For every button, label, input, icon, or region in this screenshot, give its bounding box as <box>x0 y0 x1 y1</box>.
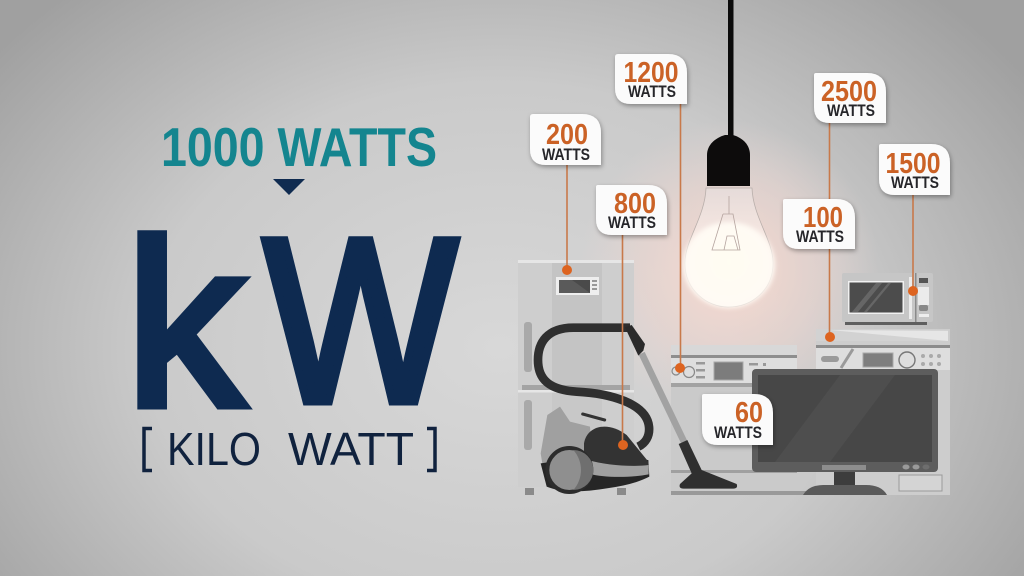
vacuum lid handle <box>583 414 605 420</box>
stove body <box>816 329 950 495</box>
opening bracket <box>144 428 152 470</box>
unit: WATTS <box>714 423 762 442</box>
unit: WATTS <box>891 173 939 192</box>
card <box>879 144 950 195</box>
stove controls <box>821 349 941 368</box>
fridge body <box>518 262 634 487</box>
label: 800 watts <box>596 185 667 450</box>
label: 100 watts <box>783 199 855 249</box>
bulb inner light <box>683 222 775 308</box>
label: 200 watts <box>530 114 601 275</box>
value: 1500 <box>886 148 940 180</box>
appliance: television <box>752 369 938 495</box>
bulb filament <box>712 196 740 250</box>
value: 800 <box>614 188 656 220</box>
vacuum hose grip <box>625 325 645 356</box>
label: 1200 watts <box>615 54 687 373</box>
bulb socket <box>707 135 750 186</box>
letter W: W <box>264 192 457 451</box>
vacuum nozzle <box>679 440 737 489</box>
card <box>814 73 886 123</box>
washer floor line <box>671 491 950 495</box>
fridge display <box>556 277 599 295</box>
closing bracket <box>427 428 435 470</box>
appliance: refrigerator <box>518 260 634 495</box>
appliance: microwave <box>842 273 933 325</box>
card <box>596 185 667 235</box>
headline: 1000 watts: 1000 WATTS <box>161 116 437 178</box>
light bulb <box>683 0 775 308</box>
light glow <box>579 120 879 420</box>
value: 100 <box>803 202 843 234</box>
word: kilo: KILO <box>167 423 261 475</box>
card <box>615 54 687 104</box>
leader line <box>912 195 914 291</box>
marker dot <box>908 286 918 296</box>
vacuum hose <box>538 328 649 447</box>
fridge handles <box>524 322 532 372</box>
vacuum wheel <box>547 448 593 492</box>
unit: WATTS <box>608 213 656 232</box>
letter k: k <box>126 192 244 455</box>
leader line <box>622 235 624 445</box>
vacuum body grey rear <box>541 407 593 480</box>
value: 60 <box>735 397 763 429</box>
unit: WATTS <box>827 101 875 120</box>
tv buttons <box>822 464 930 470</box>
label: 2500 watts <box>814 73 886 342</box>
value: 2500 <box>821 76 877 108</box>
subtitle: kilo watt <box>144 423 435 475</box>
value: 200 <box>546 119 588 151</box>
vacuum dark base <box>541 457 649 491</box>
appliance: washing machine <box>671 345 950 495</box>
word: watt: WATT <box>288 423 414 475</box>
appliance: stove <box>816 329 950 495</box>
vacuum stripe <box>587 460 649 477</box>
arrow pointing down <box>273 179 305 195</box>
microwave keypad <box>918 278 929 317</box>
washer body <box>671 345 797 495</box>
kW symbol <box>126 192 457 455</box>
tv frame <box>752 369 938 472</box>
vacuum dark dome <box>584 427 649 467</box>
fridge feet <box>525 488 534 495</box>
unit: WATTS <box>542 145 590 164</box>
value: 1200 <box>624 57 678 89</box>
marker dot <box>825 332 835 342</box>
bulb glass <box>685 188 773 307</box>
label: 1500 watts <box>879 144 950 296</box>
card <box>530 114 601 165</box>
card <box>702 394 773 445</box>
marker dot <box>562 265 572 275</box>
leader line <box>566 165 568 270</box>
card <box>783 199 855 249</box>
appliance: vacuum cleaner <box>538 325 737 492</box>
microwave body <box>842 273 933 322</box>
microwave door handle <box>909 277 912 319</box>
microwave window <box>848 281 904 314</box>
tv stand <box>834 471 855 486</box>
leader line <box>828 123 830 337</box>
marker dot <box>675 363 685 373</box>
leader line <box>680 104 682 368</box>
bulb cord <box>728 0 734 140</box>
stove drawer <box>899 475 942 491</box>
washer controls <box>672 362 766 380</box>
label: 60 watts <box>702 394 773 445</box>
unit: WATTS <box>628 82 676 101</box>
unit: WATTS <box>796 227 844 246</box>
vacuum tube <box>642 353 684 442</box>
tv screen <box>758 375 932 462</box>
marker dot <box>618 440 628 450</box>
